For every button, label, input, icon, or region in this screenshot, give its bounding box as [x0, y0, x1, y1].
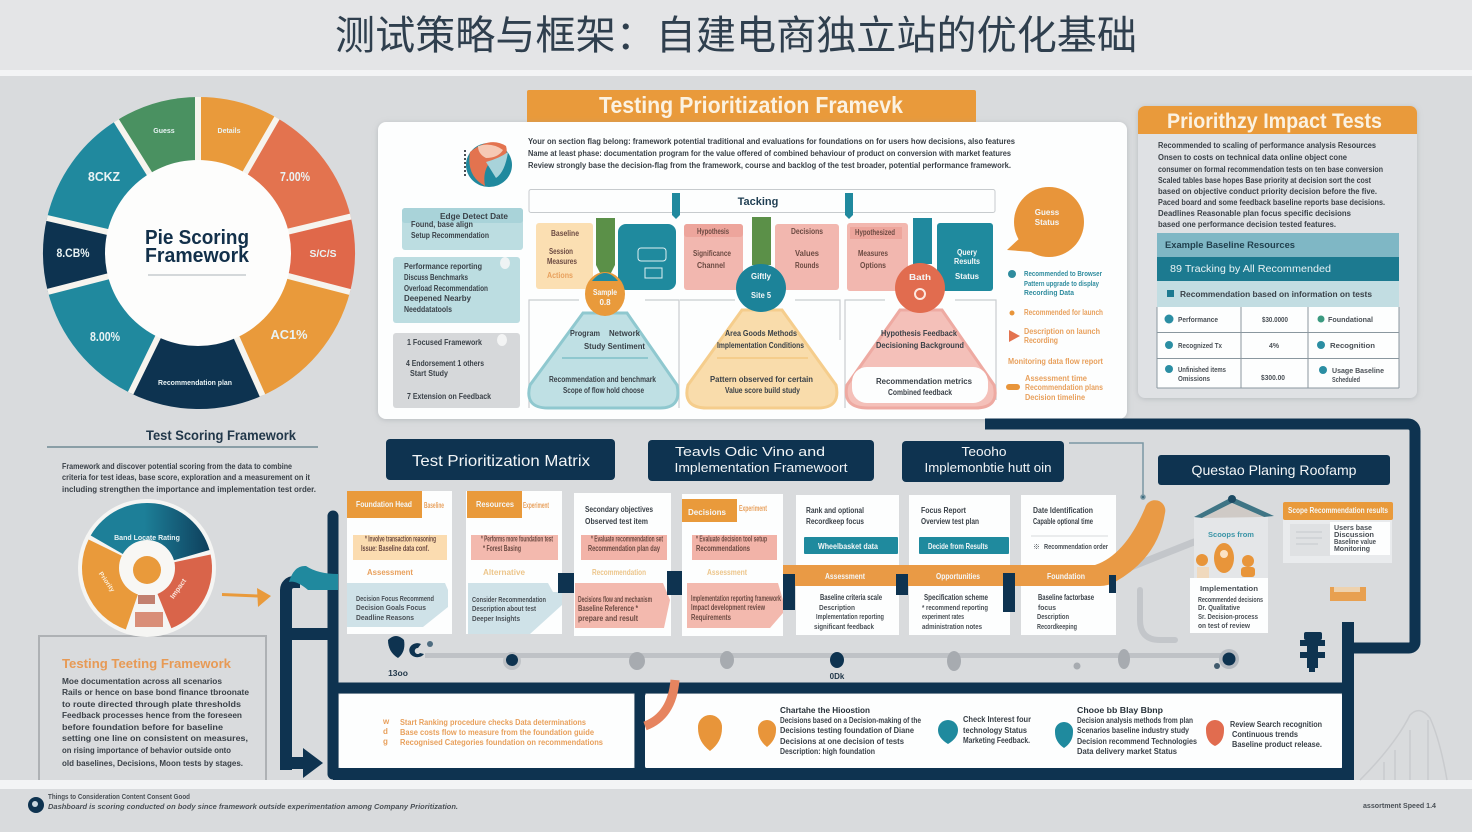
impact table: Omissions: [1178, 376, 1210, 383]
implementation card 1: Implementation reporting: [816, 614, 884, 621]
matrix card 1: Foundation Head: [356, 500, 412, 509]
panel: testing framework note: before foundation before for baseline: [62, 723, 224, 732]
flask: amber: Pattern observed for certain: [710, 375, 813, 384]
donut segment labels: Recommendation plan: [158, 380, 232, 387]
matrix card 3: Secondary objectives: [585, 505, 653, 514]
connector: grey stems: [1116, 542, 1194, 640]
note box: teal middle: Needdatatools: [404, 305, 452, 314]
matrix card 2: Experiment: [523, 501, 549, 510]
panel: test scoring framework: [47, 428, 318, 494]
implementation card 2: * recommend reporting: [922, 605, 988, 612]
implementation card 2: Focus Report: [921, 506, 966, 515]
header: quarterly planning roadmap: [1158, 455, 1390, 485]
implementation card 3: [1021, 495, 1116, 635]
matrix card 4: Impact development review: [691, 603, 766, 612]
column 3 cards: Status: [955, 272, 980, 281]
speech bubble: Status: [1035, 218, 1060, 227]
notes block 2: technology Status: [963, 726, 1028, 735]
orange sweep band: Opportunities: [936, 572, 980, 581]
donut segment labels: Guess: [153, 128, 175, 135]
header: quarterly planning roadmap: Questao Planing Roofamp: [1192, 462, 1357, 478]
note box: grey: Start Study: [410, 369, 448, 378]
header: implementation framework: Implementation Framewoort: [674, 461, 848, 475]
matrix card 1: * Involve transaction reasoning: [365, 534, 436, 544]
note box: teal top: Edge Detect Date: [440, 212, 509, 221]
legend list: [1006, 269, 1103, 402]
flask: teal: Recommendation and benchmark: [549, 375, 656, 384]
implementation card 3: focus: [1038, 605, 1056, 612]
icon: colored globe: [465, 142, 512, 187]
matrix card 1: Deadline Reasons: [356, 615, 414, 622]
donut segment labels: 8.00%: [90, 329, 120, 344]
matrix card 1: Assessment: [367, 568, 413, 577]
legend list: Recommended for launch: [1024, 308, 1103, 317]
implementation card 1: Wheelbasket data: [818, 542, 878, 551]
panel: priority impact tests: Priorithzy Impact Tests: [1167, 110, 1382, 133]
node: teal circle: Site 5: [751, 291, 772, 300]
matrix card 2: Alternative: [483, 568, 526, 577]
node: orange circle: 0.8: [599, 298, 611, 307]
legend list: Description on launch: [1024, 327, 1100, 336]
notes block 2: Check Interest four: [963, 715, 1031, 724]
notes block 4: Review Search recognition: [1230, 720, 1322, 729]
node: teal circle: [736, 264, 786, 312]
column 2 cards: Values: [795, 249, 820, 258]
connector: thin line to curve: [1069, 443, 1145, 499]
flask: teal: Scope of flow hold choose: [563, 386, 644, 395]
matrix card 1: [347, 491, 452, 634]
column 2 cards: Significance: [693, 249, 731, 258]
node: teal circle: Giftly: [751, 272, 772, 281]
decor: grey bell chart: [1360, 711, 1447, 780]
implementation card 2: [909, 495, 1010, 635]
impact table: Example Baseline Resources: [1165, 240, 1295, 250]
implementation card 1: [796, 495, 899, 635]
notes block 2: [963, 715, 1031, 745]
implementation card 1: Baseline criteria scale: [820, 593, 882, 602]
icon: orange pin small: [758, 720, 776, 747]
icon: small orange box: [1330, 587, 1366, 601]
legend list: Assessment time: [1025, 374, 1088, 383]
roadmap text card: [1190, 578, 1268, 633]
note box: teal top: Found, base align: [411, 220, 473, 229]
panel: quarterly roadmap house: Scoops from: [1208, 532, 1254, 539]
notes block 1: Chartahe the Hioostion: [780, 706, 870, 715]
impact table: [1157, 233, 1399, 388]
icon: footer badge: [28, 797, 44, 813]
chart: small scoring wheel: [78, 499, 216, 637]
impact table: 4%: [1269, 343, 1280, 350]
grid lines: [529, 300, 996, 408]
note box: grey: 4 Endorsement 1 others: [406, 359, 484, 368]
donut segment labels: 8CKZ: [88, 169, 120, 184]
matrix card 4: Decisions: [688, 508, 727, 517]
note box: teal middle: Discuss Benchmarks: [404, 273, 468, 282]
implementation card 3: Recommendation order: [1044, 544, 1108, 551]
donut segment labels: 7.00%: [280, 169, 310, 184]
matrix card 3: * Evaluate recommendation set: [591, 534, 663, 544]
priority text block: Paced board and some feedback baseline reports base decisions.: [1158, 198, 1385, 207]
note box: teal top: [402, 208, 523, 250]
orange sweep band: Assessment: [825, 572, 865, 581]
implementation card 1: significant feedback: [814, 624, 874, 631]
donut segment labels: Details: [218, 128, 241, 135]
header: implementation framework: Teavls Odic Vino and: [675, 445, 825, 459]
matrix card 4: Experiment: [739, 504, 767, 513]
header: testing prioritization framework: Testing Prioritization Framevk: [599, 92, 903, 118]
matrix card 1: Baseline: [424, 501, 444, 510]
panel: test scoring framework: criteria for test ideas, base score, exploration and a measurement on it: [62, 473, 310, 482]
speech bubble: Guess: [1035, 208, 1060, 217]
icon: orange pin large: [698, 715, 722, 751]
note box: teal middle: Deepened Nearby: [404, 294, 472, 303]
intro text: Review strongly base the decision-flag from the framework, course and backlog of the test broader, potential performance framework.: [528, 161, 1011, 170]
impact table: Performance: [1178, 317, 1218, 324]
panel: bottom left key notes: Start Ranking procedure checks Data determinations: [400, 718, 587, 727]
implementation card 3: Description: [1037, 614, 1069, 621]
column 3 cards: Results: [954, 257, 980, 266]
notes block 1: Description: high foundation: [780, 747, 875, 756]
icon: teal pin 2: [1055, 722, 1073, 748]
flask: coral: Recommendation metrics: [876, 377, 973, 386]
impact table: Recognition: [1330, 343, 1375, 350]
panel: testing framework note: Testing Teeting Framework: [62, 656, 232, 671]
matrix card 2: Resources: [476, 500, 515, 509]
matrix card 4: Implementation reporting framework: [691, 594, 781, 603]
notes block 3: [1077, 706, 1197, 756]
flask: teal: Network: [609, 329, 641, 338]
timeline start marker: 13oo: [388, 668, 408, 678]
roadmap text card: on test of review: [1198, 623, 1251, 630]
impact table: Foundational: [1328, 317, 1373, 324]
header: testing prioritization framework: [527, 90, 976, 124]
implementation card 1: Recordkeep focus: [806, 517, 864, 526]
matrix card 4: Assessment: [707, 568, 747, 577]
column 2 cards: Decisions: [791, 227, 823, 236]
legend list: Recording Data: [1024, 288, 1075, 297]
column 1 cards: Actions: [547, 271, 573, 280]
note box: grey: [393, 333, 520, 408]
notes block 4: Continuous trends: [1232, 730, 1299, 739]
matrix card 2: Deeper Insights: [472, 616, 520, 623]
panel: quarterly roadmap house: [1190, 495, 1274, 633]
connector: navy pipe network: [286, 424, 1415, 774]
priority text block: based one performance decision tested features.: [1158, 220, 1336, 229]
tacking header bar: [529, 190, 995, 219]
icon: teal pin: [938, 720, 958, 744]
panel: prioritization framework: [378, 122, 1127, 419]
notes block 2: Marketing Feedback.: [963, 736, 1030, 745]
donut segment labels: [56, 128, 337, 387]
note box: grey: 1 Focused Framework: [407, 338, 482, 347]
column 1 cards: Measures: [547, 257, 577, 266]
panel: roadmap document card: [1283, 502, 1393, 563]
matrix card 4: Requirements: [691, 613, 731, 622]
matrix card 3: prepare and result: [578, 614, 638, 623]
arrow: navy into bottom panel: [303, 748, 323, 778]
timeline start marker: [388, 636, 433, 678]
implementation card 2: experiment rates: [922, 614, 964, 621]
matrix card 4: [682, 494, 783, 636]
matrix card 1: Decision Focus Recommend: [356, 596, 434, 603]
legend list: Recording: [1024, 336, 1058, 345]
notes block 1: Decisions testing foundation of Diane: [780, 726, 915, 735]
panel: bottom left key notes: w: [382, 717, 390, 726]
column 1 cards: [536, 218, 676, 290]
panel: test scoring framework: Test Scoring Framework: [146, 428, 296, 443]
priority text block: Recommended to scaling of performance analysis Resources: [1158, 141, 1377, 150]
note box: grey: 7 Extension on Feedback: [407, 392, 491, 401]
impact table: Recognized Tx: [1178, 343, 1222, 350]
implementation card 3: ※: [1033, 543, 1040, 551]
implementation card 1: Rank and optional: [806, 506, 864, 515]
column 2 cards: Hypothesis: [697, 227, 729, 236]
header: implementation button: [902, 441, 1064, 482]
header: implementation framework: [648, 440, 874, 481]
panel: testing framework note: to route directed through plate thresholds: [62, 700, 242, 709]
note box: teal middle: Performance reporting: [404, 262, 482, 271]
chart: small scoring wheel: Priority: [97, 571, 116, 594]
intro text: Name at least phase: documentation program for the value offered of combined behaviour of product on conversion with market features: [528, 149, 1012, 158]
note box: teal middle: Overload Recommendation: [404, 284, 488, 293]
impact table: Unfinished items: [1178, 367, 1226, 374]
implementation card 3: Recordkeeping: [1037, 624, 1077, 631]
impact table: $300.00: [1261, 375, 1285, 382]
notes block 3: Decision recommend Technologies: [1077, 737, 1197, 746]
notes block 1: [780, 706, 921, 756]
panel: bottom left key notes: Recognised Categories foundation on recommendations: [400, 738, 604, 747]
chart: small scoring wheel: Impact: [169, 577, 188, 600]
node: orange circle: [585, 272, 625, 316]
priority text block: Scaled tables base hopes Base priority at decision sort the cost: [1158, 176, 1371, 185]
panel: bottom left key notes: [339, 694, 634, 768]
flask: amber: Value score build study: [725, 386, 800, 395]
arrow: orange to matrix: [222, 588, 271, 607]
implementation card 3: Capable optional time: [1033, 517, 1093, 526]
tacking header bar: Tacking: [738, 196, 778, 208]
connector tabs between cards: [558, 571, 1116, 612]
orange sweep band: Foundation: [1047, 572, 1085, 581]
matrix card 4: * Evaluate decision tool setup: [696, 534, 767, 544]
column 1 cards: Session: [549, 247, 573, 256]
header: test prioritization matrix: [386, 439, 615, 480]
priority text block: based on objective conduct priority decision before the five.: [1158, 187, 1377, 196]
note box: teal top: Setup Recommendation: [411, 231, 489, 240]
panel: bottom left key notes: Base costs flow to measure from the foundation guide: [400, 728, 595, 737]
panel: test scoring framework: Framework and discover potential scoring from the data to combine: [62, 462, 292, 471]
impact table: Recommendation based on information on tests: [1180, 290, 1373, 299]
roadmap text card: Recommended decisions: [1198, 597, 1263, 604]
flask: amber: Implementation Conditions: [717, 341, 804, 350]
panel: roadmap document card: Discussion: [1334, 532, 1374, 539]
chart: small scoring wheel: Band Locate Rating: [114, 535, 180, 542]
roadmap text card: Dr. Qualitative: [1198, 605, 1240, 612]
panel: testing framework note: old baselines, Decisions, Moon tests by stages.: [62, 759, 243, 768]
panel: test scoring framework: including strengthen the importance and implementation test order.: [62, 485, 316, 494]
matrix card 3: [574, 493, 671, 636]
flask: teal: [529, 313, 678, 408]
panel: roadmap document card: Baseline value: [1334, 539, 1376, 546]
legend list: Decision timeline: [1025, 393, 1086, 402]
flask: amber: Area Goods Methods: [725, 329, 797, 338]
column 2 cards: Channel: [697, 261, 725, 270]
node: coral circle: Bath: [909, 273, 931, 282]
impact table: $30.0000: [1262, 317, 1288, 324]
roadmap text card: Sr. Decision-process: [1198, 614, 1258, 621]
timeline: [388, 636, 1239, 681]
notes block 1: Decisions at one decision of tests: [780, 737, 905, 746]
implementation card 2: Specification scheme: [924, 593, 988, 602]
panel: bottom left key notes: g: [383, 737, 388, 746]
connector: coral curve: [645, 680, 675, 726]
priority text block: [1158, 141, 1385, 229]
notes block 3: Data delivery market Status: [1077, 747, 1178, 756]
flask: coral: Decisioning Background: [876, 341, 964, 350]
footer: Things to Consideration Content Consent Good: [48, 794, 190, 801]
header: test prioritization matrix: Test Prioritization Matrix: [412, 453, 590, 470]
panel: testing framework note: Moe documentation across all scenarios: [62, 677, 223, 686]
notes block 3: Decision analysis methods from plan: [1077, 716, 1193, 725]
priority text block: Onsen to costs on technical data online object cone: [1158, 153, 1348, 162]
notes block 3: Scenarios baseline industry study: [1077, 726, 1189, 735]
panel: testing framework note: setting one line on consistent on measures,: [62, 734, 248, 743]
icon: coral pin: [1206, 720, 1224, 746]
matrix card 3: Baseline Reference *: [578, 604, 639, 613]
donut segment labels: 8.CB%: [56, 246, 90, 260]
note box: teal middle: [393, 257, 520, 323]
column 3 cards: Query: [957, 248, 977, 257]
connector: teal pipe cap: [289, 566, 338, 590]
footer: Dashboard is scoring conducted on body since framework outside experimentation among Company Prioritization.: [48, 804, 458, 811]
implementation card 3: Date Identification: [1033, 506, 1093, 515]
icon: navy hydrant: [1300, 632, 1325, 672]
node: coral circle: [895, 263, 945, 313]
chart: PIE scoring donut: [43, 97, 355, 409]
implementation card 1: Description: [819, 605, 855, 612]
donut centre label: Pie Scoring: [145, 226, 249, 249]
implementation card 2: administration notes: [922, 624, 982, 631]
matrix card 1: Decision Goals Focus: [356, 605, 426, 612]
legend list: Recommendation plans: [1025, 383, 1103, 392]
panel: bottom right notes: [645, 694, 1342, 768]
panel: roadmap document card: Users base: [1334, 525, 1372, 532]
panel: bottom left key notes: d: [383, 727, 388, 736]
column 1 cards: Baseline: [551, 229, 579, 238]
panel: testing framework note: Rails or hence on base bond finance tbroonate: [62, 688, 250, 697]
matrix card 1: Issue: Baseline data conf.: [361, 544, 429, 553]
timeline: 0Dk: [830, 672, 845, 681]
orange sweep band: [783, 500, 1165, 586]
implementation card 2: Decide from Results: [928, 542, 988, 551]
notes block 3: Chooe bb Blay Bbnp: [1077, 706, 1163, 715]
matrix card 4: Recommendations: [696, 544, 750, 553]
column 2 cards: Rounds: [795, 261, 819, 270]
matrix card 2: * Performs more foundation test: [481, 534, 553, 544]
matrix card 2: * Forest Basing: [483, 544, 521, 553]
panel: testing framework note: on rising importance of behavior outside onto: [62, 746, 231, 755]
notes block 4: [1230, 720, 1322, 749]
flask: coral: [846, 310, 995, 408]
roadmap text card: Implementation: [1200, 586, 1258, 593]
title: 测试策略与框架：自建电商独立站的优化基础: [335, 14, 1137, 58]
column 3 cards: Options: [860, 261, 886, 270]
node: orange circle: Sample: [593, 288, 617, 297]
footer: [28, 794, 1436, 813]
panel: roadmap document card: Monitoring: [1334, 546, 1370, 553]
header: implementation button: Implemonbtie hutt oin: [924, 461, 1052, 475]
implementation card 2: Overview test plan: [921, 517, 979, 526]
donut segment labels: AC1%: [270, 327, 308, 342]
matrix card 3: Decisions flow and mechanism: [578, 595, 652, 604]
flask: amber: [687, 310, 837, 408]
matrix card 2: Consider Recommendation: [472, 597, 546, 604]
donut centre label: [145, 226, 250, 275]
matrix card 3: Observed test item: [585, 517, 648, 526]
intro text: [528, 137, 1016, 170]
footer: assortment Speed 1.4: [1363, 803, 1436, 810]
matrix card 2: [466, 491, 562, 634]
panel: priority impact tests: [1138, 106, 1417, 398]
matrix card 3: Recommendation: [592, 568, 646, 577]
impact table: Scheduled: [1332, 377, 1360, 384]
priority text block: Deadlines Reasonable plan focus specific decisions: [1158, 209, 1352, 218]
flask: teal: Study Sentiment: [584, 342, 645, 351]
legend list: Pattern upgrade to display: [1024, 279, 1100, 288]
legend list: Monitoring data flow report: [1008, 357, 1103, 366]
flask: coral: Hypothesis Feedback: [881, 329, 958, 338]
flask: coral: Combined feedback: [888, 388, 952, 397]
notes block 1: Decisions based on a Decision-making of the: [780, 716, 921, 725]
column 3 cards: Hypothesized: [855, 228, 895, 237]
impact table: 89 Tracking by All Recommended: [1170, 264, 1331, 275]
intro text: Your on section flag belong: framework potential traditional and evaluations for foundations on for users how decisions, also features: [528, 137, 1016, 146]
donut segment labels: S/C/S: [310, 249, 337, 260]
flask: teal: Program: [570, 329, 600, 338]
matrix card 3: Recommendation plan day: [588, 544, 660, 553]
column 3 cards: Measures: [858, 249, 888, 258]
priority text block: consumer on formal recommendation tests on ten base conversion: [1158, 165, 1383, 174]
panel: roadmap document card: Scope Recommendation results: [1288, 506, 1388, 515]
speech bubble: [1007, 187, 1084, 257]
header: implementation button: Teooho: [962, 445, 1007, 459]
impact table: Usage Baseline: [1332, 368, 1384, 375]
implementation card 3: Baseline factorbase: [1038, 593, 1094, 602]
matrix card 2: Description about test: [472, 606, 537, 613]
donut centre label: Framework: [145, 244, 250, 267]
column 3 cards: [847, 218, 993, 291]
legend list: Recommended to Browser: [1024, 269, 1102, 278]
notes block 4: Baseline product release.: [1232, 740, 1322, 749]
column 2 cards: [684, 217, 839, 290]
panel: testing framework note: [39, 636, 266, 782]
panel: testing framework note: Feedback processes hence from the foreseen: [62, 711, 242, 720]
